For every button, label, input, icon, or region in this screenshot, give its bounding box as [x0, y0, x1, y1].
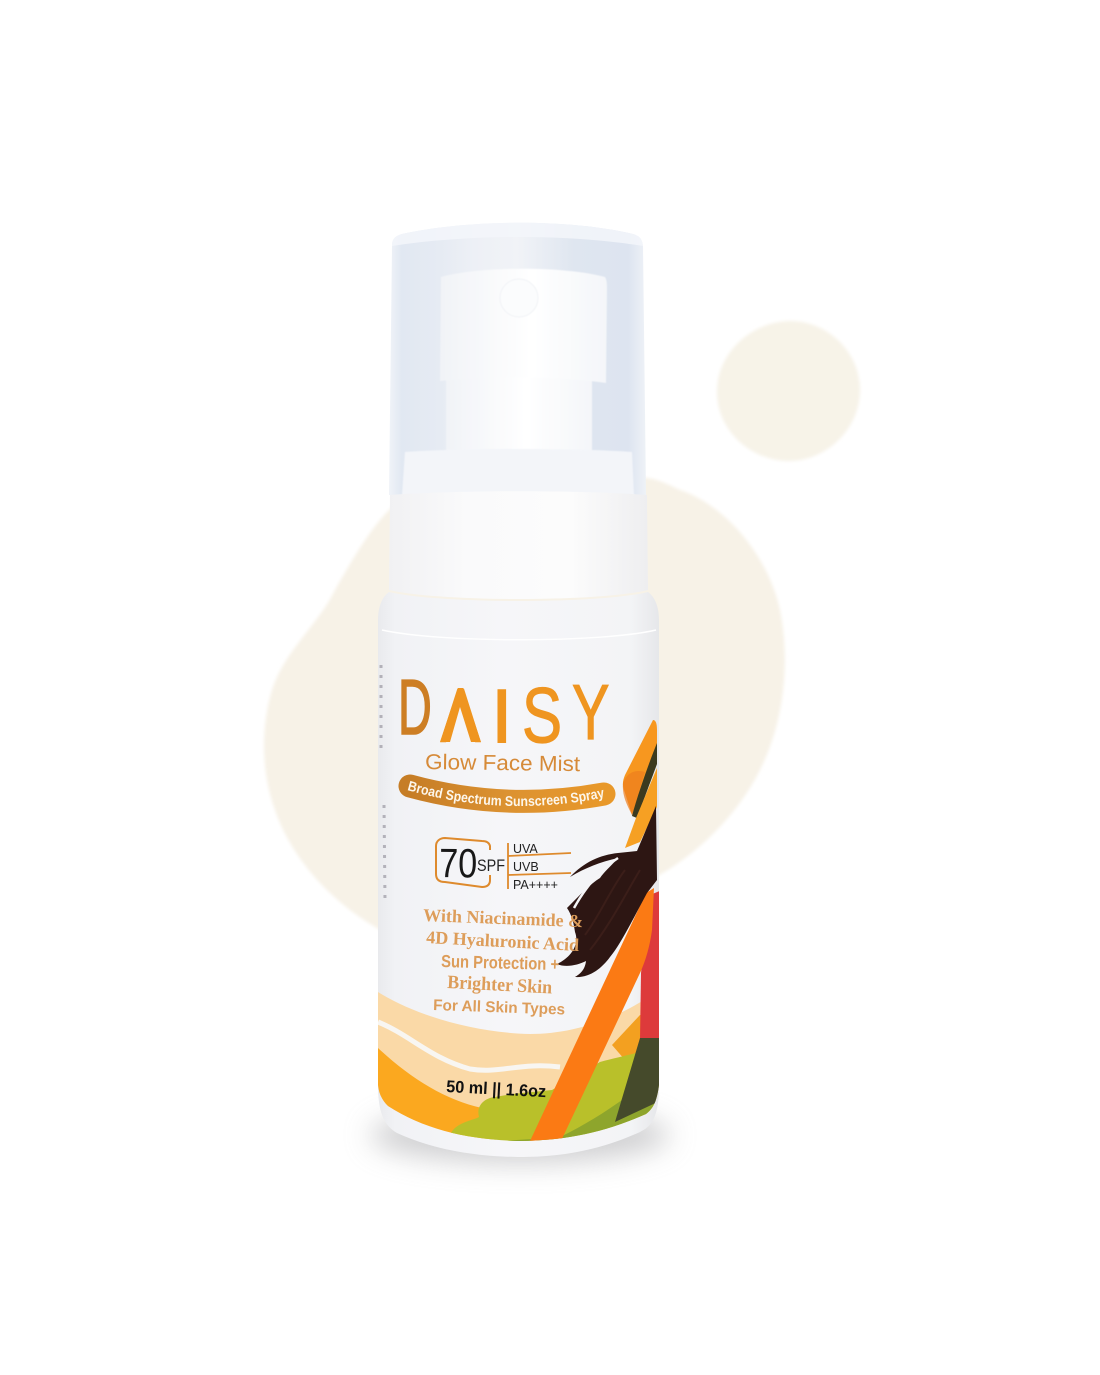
- SPF badge: PA++++: [513, 878, 558, 892]
- bottle body: [378, 592, 659, 1157]
- figure: orange arm: [530, 888, 654, 1141]
- SPF badge: [436, 838, 571, 892]
- brand name DAISY: D: [398, 664, 432, 751]
- brand name DAISY: S: [522, 671, 562, 759]
- figure: red dress: [640, 891, 659, 1038]
- SPF badge: UVB: [513, 860, 539, 874]
- transparent cap: [389, 223, 646, 495]
- claims text: [423, 905, 584, 1019]
- label illustration: [378, 888, 662, 1150]
- brand name DAISY: A: [440, 671, 481, 759]
- collar: [389, 491, 648, 599]
- product name: Glow Face Mist: [425, 750, 580, 776]
- figure: dark trousers: [615, 1038, 662, 1122]
- green hills: [451, 1053, 659, 1141]
- peach band: [378, 990, 659, 1120]
- cap inner collar: [402, 449, 634, 495]
- figure: hair: [557, 806, 657, 977]
- brand name DAISY: [398, 664, 609, 760]
- claims text: 4D Hyaluronic Acid: [426, 927, 580, 955]
- side fine print: [381, 665, 385, 900]
- SPF badge: UVA: [513, 842, 538, 856]
- orange hill: [378, 1048, 496, 1140]
- cream swatch: small drop: [717, 321, 860, 461]
- claims text: Brighter Skin: [447, 972, 553, 999]
- bottle shadow: [370, 1107, 670, 1163]
- SPF badge: SPF: [477, 857, 505, 875]
- volume: 50 ml || 1.6oz: [446, 1077, 547, 1101]
- pump head: [440, 269, 607, 453]
- claims text: With Niacinamide &: [423, 905, 584, 931]
- SPF badge: 70: [439, 840, 478, 887]
- brand name DAISY: I: [489, 674, 515, 760]
- white wave: [378, 1022, 560, 1070]
- figure: hat: [623, 720, 657, 848]
- claims text: Sun Protection +: [441, 951, 559, 974]
- brand name DAISY: Y: [572, 669, 609, 756]
- orange pill banner: Broad Spectrum Sunscreen Spray: [408, 780, 604, 806]
- claims text: For All Skin Types: [433, 997, 565, 1019]
- small orange slope: [612, 1015, 640, 1056]
- cream swatch: large blob: [264, 478, 785, 935]
- product bottle: [378, 222, 659, 1157]
